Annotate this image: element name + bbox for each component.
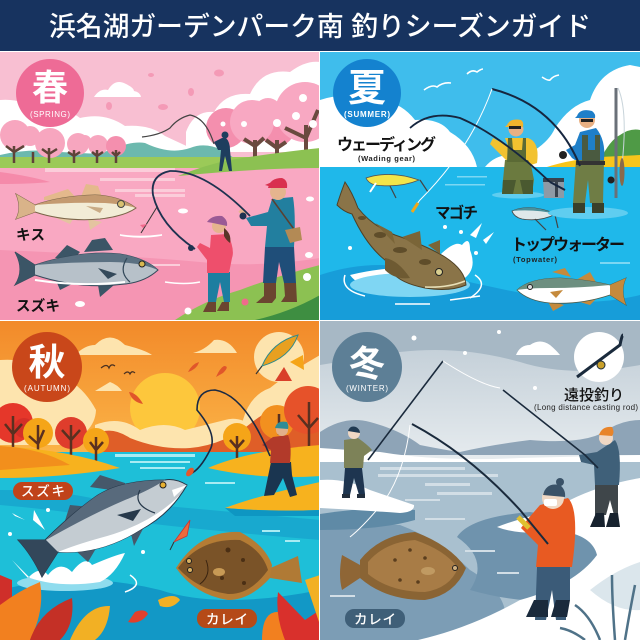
title banner bbox=[0, 0, 640, 51]
angler right bbox=[548, 110, 628, 219]
lure small bbox=[170, 520, 190, 550]
rod badge winter bbox=[574, 332, 624, 382]
lure silver bbox=[512, 208, 558, 230]
cherry trees right bbox=[206, 82, 319, 156]
label: suzuki autumn: スズキ bbox=[21, 483, 65, 499]
label: topwater: (Topwater) bbox=[513, 255, 558, 264]
splash bbox=[344, 223, 494, 304]
panel: summer bbox=[320, 52, 640, 320]
distant angler bbox=[142, 115, 232, 171]
rod autumn bbox=[184, 390, 270, 478]
label: karei autumn: カレイ bbox=[206, 612, 248, 627]
badge: summer: 夏 bbox=[348, 68, 386, 110]
fish: flounder winter bbox=[340, 532, 466, 600]
badge: autumn: (AUTUMN) bbox=[24, 384, 70, 393]
autumn trees right bbox=[223, 386, 319, 458]
fish: suzuki bbox=[15, 238, 158, 297]
angler child bbox=[197, 216, 233, 312]
badge: spring: (SPRING) bbox=[30, 110, 70, 119]
label: karei autumn bbox=[197, 609, 257, 628]
fish: flounder autumn bbox=[176, 532, 302, 600]
fishing rods spring bbox=[140, 171, 250, 251]
badge: autumn: 秋 bbox=[28, 342, 66, 383]
angler center winter bbox=[521, 478, 575, 620]
label: karei winter bbox=[345, 609, 405, 628]
label: long distance casting: (Long distance casting rod) bbox=[534, 403, 638, 412]
badge: spring: 春 bbox=[32, 67, 68, 108]
badge: winter: (WINTER) bbox=[346, 384, 388, 393]
badge: winter bbox=[332, 332, 402, 402]
title banner: 浜名湖ガーデンパーク南 釣りシーズンガイド bbox=[49, 12, 591, 42]
fish: kisu bbox=[16, 184, 136, 230]
rods summer bbox=[410, 88, 624, 212]
badge: summer: (SUMMER) bbox=[344, 110, 390, 119]
label: karei winter: カレイ bbox=[354, 612, 396, 627]
snow bank bbox=[418, 478, 640, 640]
label: wading gear: (Wading gear) bbox=[358, 154, 416, 163]
fish: magochi bbox=[337, 182, 466, 289]
label: topwater: トップウォーター bbox=[511, 236, 625, 254]
label: wading gear bbox=[337, 135, 436, 163]
angler right winter bbox=[579, 427, 620, 527]
label: magochi: マゴチ bbox=[435, 203, 478, 222]
angler autumn bbox=[262, 422, 297, 497]
bucket bbox=[543, 178, 564, 198]
angler man bbox=[240, 178, 302, 303]
label: long distance casting: 遠投釣り bbox=[564, 387, 624, 404]
badge: autumn bbox=[12, 332, 82, 402]
badge: summer bbox=[333, 59, 401, 127]
panel: winter bbox=[320, 321, 640, 640]
water splash bbox=[8, 508, 145, 592]
label: long distance casting bbox=[534, 387, 638, 412]
reeds bbox=[560, 575, 635, 640]
rods winter bbox=[350, 361, 598, 544]
angler left bbox=[490, 120, 544, 198]
panel: spring bbox=[0, 52, 335, 320]
fish: suzuki autumn bbox=[18, 475, 187, 577]
badge: winter: 冬 bbox=[349, 343, 385, 384]
panel: autumn bbox=[0, 321, 332, 640]
angler left winter bbox=[342, 426, 372, 498]
cherry trees left bbox=[0, 120, 126, 163]
label: suzuki autumn bbox=[13, 482, 73, 500]
lure badge autumn bbox=[254, 332, 304, 382]
autumn trees left bbox=[0, 403, 109, 462]
shores bbox=[0, 445, 320, 516]
fish: zander bbox=[517, 268, 626, 311]
lure yellow bbox=[366, 174, 428, 198]
foreground leaves bbox=[0, 575, 320, 640]
label: suzuki: スズキ bbox=[16, 297, 60, 315]
badge: spring bbox=[16, 59, 84, 127]
label: topwater bbox=[511, 236, 625, 264]
bank with flowers bbox=[175, 265, 320, 320]
label: wading gear: ウェーディング bbox=[337, 135, 436, 154]
label: kisu: キス bbox=[16, 228, 45, 244]
